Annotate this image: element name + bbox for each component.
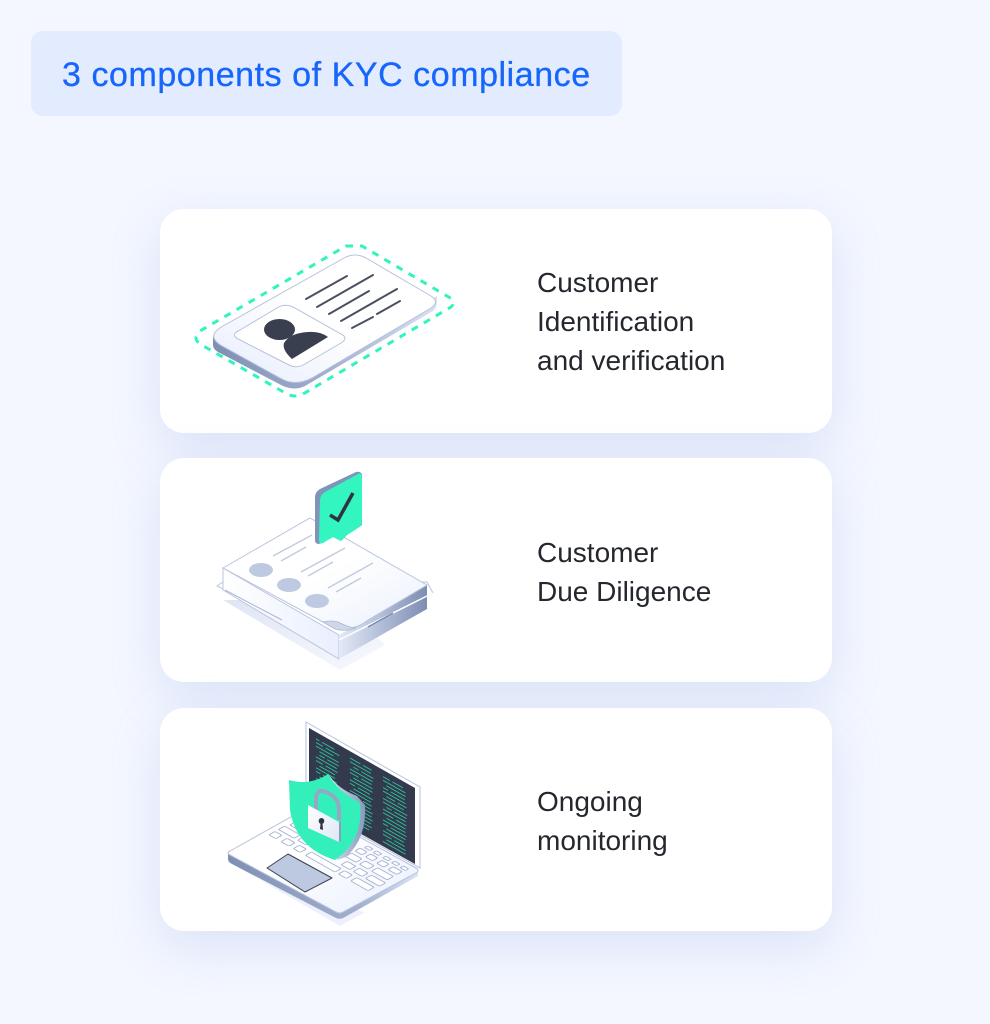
ongoing monitoring text bbox=[537, 786, 668, 856]
panel: customer identification card bbox=[160, 209, 832, 433]
code lines on screen bbox=[316, 739, 407, 855]
panel: ongoing monitoring card bbox=[160, 708, 832, 931]
icon: laptop with security shield bbox=[228, 721, 420, 926]
shield with padlock bbox=[289, 773, 365, 860]
customer due diligence text: Due Diligence bbox=[537, 576, 711, 607]
title banner bbox=[31, 31, 622, 116]
customer identification text bbox=[537, 267, 725, 376]
customer due diligence text bbox=[537, 537, 711, 607]
icon: ID document bbox=[194, 244, 454, 398]
touchpad bbox=[267, 854, 332, 892]
ongoing monitoring text: monitoring bbox=[537, 825, 668, 856]
title text: 3 components of KYC compliance bbox=[62, 56, 591, 94]
keyboard keys bbox=[269, 813, 409, 892]
check badge bbox=[315, 472, 362, 544]
customer identification text: Customer bbox=[537, 267, 658, 298]
icon: document stack with check badge bbox=[216, 472, 434, 670]
customer identification text: and verification bbox=[537, 345, 725, 376]
ongoing monitoring text: Ongoing bbox=[537, 786, 643, 817]
customer due diligence text: Customer bbox=[537, 537, 658, 568]
panel: customer due diligence card bbox=[160, 458, 832, 682]
customer identification text: Identification bbox=[537, 306, 694, 337]
